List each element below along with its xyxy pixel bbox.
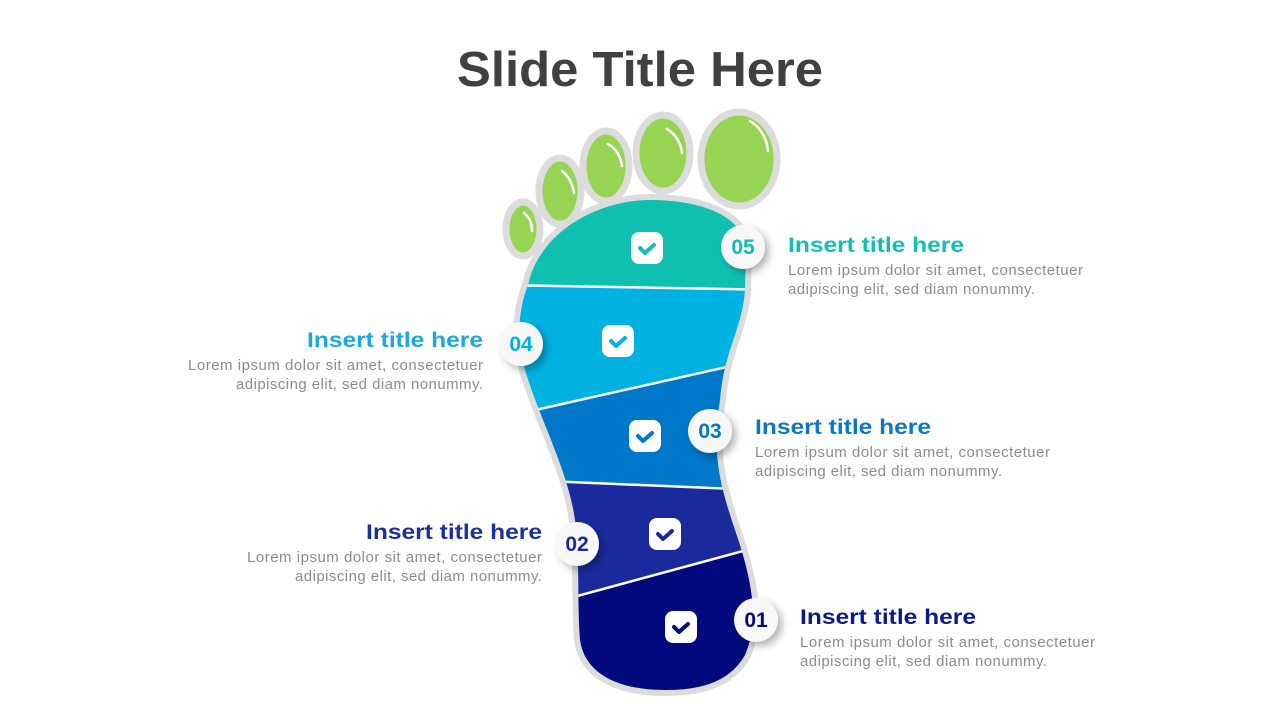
number badges: 02	[565, 533, 589, 556]
text 02: Lorem ipsum dolor sit amet, consectetuer	[247, 549, 542, 566]
check icons	[602, 232, 697, 643]
foot graphic	[500, 112, 780, 700]
text 03: Lorem ipsum dolor sit amet, consectetuer	[755, 444, 1050, 461]
text 05: Lorem ipsum dolor sit amet, consectetuer	[788, 262, 1083, 279]
text 04: Insert title here	[307, 329, 483, 352]
number badges: 05	[731, 236, 755, 259]
text 04	[188, 329, 483, 393]
text 03	[755, 416, 1050, 480]
text 02	[247, 521, 542, 585]
foot bands	[520, 200, 752, 690]
text 02: Insert title here	[366, 521, 542, 544]
text 01: Lorem ipsum dolor sit amet, consectetuer	[800, 634, 1095, 651]
foot outline	[519, 200, 753, 690]
text 04: Lorem ipsum dolor sit amet, consectetuer	[188, 357, 483, 374]
number badges: 04	[509, 333, 533, 356]
number badges: 01	[744, 609, 768, 632]
text 01: adipiscing elit, sed diam nonummy.	[800, 653, 1047, 670]
text 01	[800, 606, 1095, 670]
toes	[506, 112, 777, 256]
text 01: Insert title here	[800, 606, 976, 629]
number badges	[499, 225, 778, 642]
text 05: Insert title here	[788, 234, 964, 257]
title: Slide Title Here	[457, 43, 823, 97]
text 03: Insert title here	[755, 416, 931, 439]
text 05: adipiscing elit, sed diam nonummy.	[788, 281, 1035, 298]
text 02: adipiscing elit, sed diam nonummy.	[295, 568, 542, 585]
text 05	[788, 234, 1083, 298]
text 04: adipiscing elit, sed diam nonummy.	[236, 376, 483, 393]
text 03: adipiscing elit, sed diam nonummy.	[755, 463, 1002, 480]
number badges: 03	[698, 420, 722, 443]
